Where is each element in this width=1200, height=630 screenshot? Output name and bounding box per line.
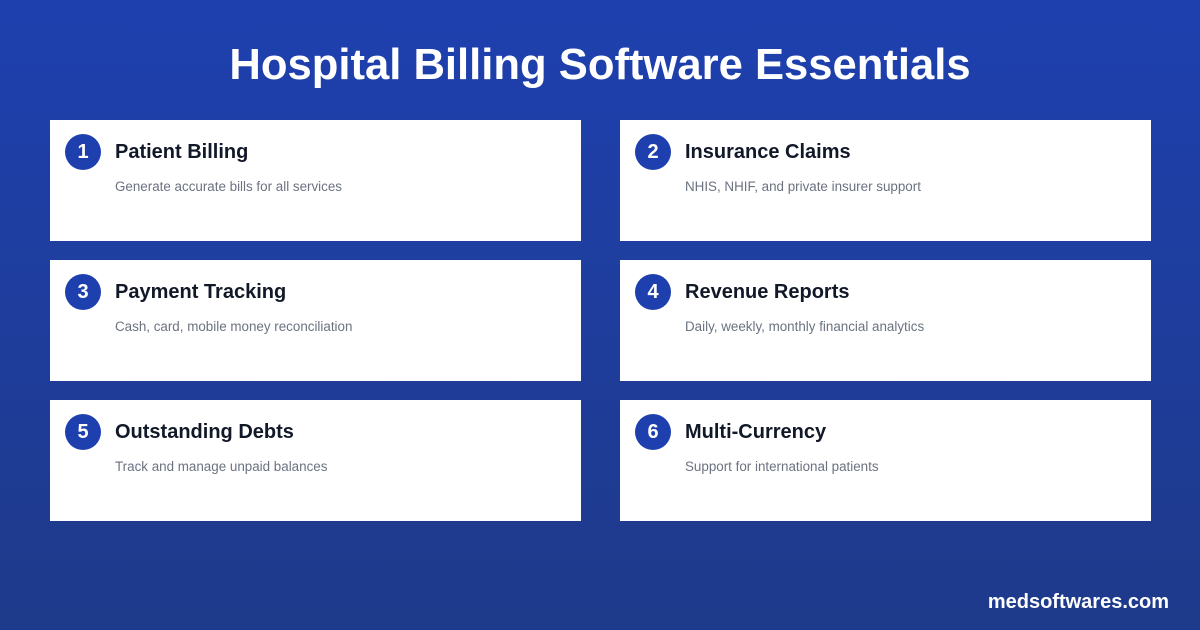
panel: multi-currency xyxy=(620,400,1151,521)
panel: outstanding debts: 5 xyxy=(77,421,89,443)
panel: patient billing: Generate accurate bills for all services xyxy=(115,179,342,194)
panel: revenue reports: 4 xyxy=(647,281,659,303)
panel: outstanding debts xyxy=(50,400,581,521)
panel: patient billing xyxy=(50,120,581,241)
panel: insurance claims xyxy=(620,120,1151,241)
panel: revenue reports: Revenue Reports xyxy=(685,281,850,303)
panel: payment tracking: 3 xyxy=(77,281,89,303)
panel: multi-currency: 6 xyxy=(647,421,659,443)
panel: outstanding debts: Track and manage unpaid balances xyxy=(115,459,327,474)
panel: insurance claims: 2 xyxy=(647,141,659,163)
panel: patient billing: 1 xyxy=(77,141,89,163)
panel: payment tracking: Payment Tracking xyxy=(115,281,286,303)
panel: revenue reports xyxy=(620,260,1151,381)
panel: insurance claims: Insurance Claims xyxy=(685,141,851,163)
panel: patient billing: Patient Billing xyxy=(115,141,248,163)
panel: insurance claims: NHIS, NHIF, and private insurer support xyxy=(685,179,921,194)
footer url: medsoftwares.com xyxy=(988,591,1169,613)
panel: revenue reports: Daily, weekly, monthly financial analytics xyxy=(685,319,924,334)
panel: multi-currency: Multi-Currency xyxy=(685,421,826,443)
panel: multi-currency: Support for international patients xyxy=(685,459,879,474)
title: Hospital Billing Software Essentials xyxy=(229,41,971,89)
panel: payment tracking: Cash, card, mobile money reconciliation xyxy=(115,319,352,334)
panel: payment tracking xyxy=(50,260,581,381)
panel: outstanding debts: Outstanding Debts xyxy=(115,421,294,443)
